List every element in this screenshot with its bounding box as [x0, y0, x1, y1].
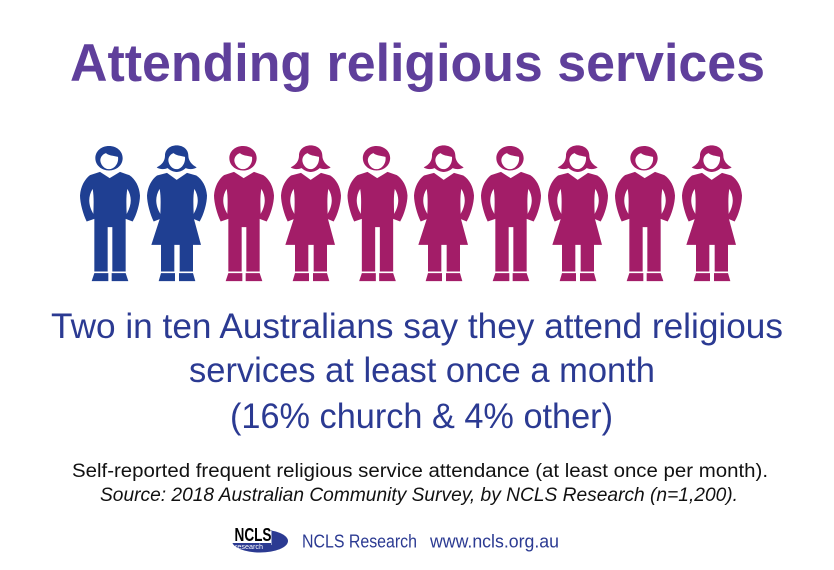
- icon: person 10 woman magenta: [682, 145, 742, 281]
- main statement: Two in ten Australians say they attend religious: [51, 307, 783, 346]
- icon: person 6 woman magenta: [414, 145, 474, 281]
- icon: person 5 man magenta: [348, 146, 407, 281]
- main statement: [51, 307, 783, 436]
- icon: person 7 man magenta: [481, 146, 541, 281]
- logo: NCLS Research: [232, 524, 288, 552]
- pictogram: ten people, two highlighted: [80, 145, 742, 281]
- logo: NCLS Research: research: [235, 544, 263, 551]
- logo: NCLS Research: NCLS: [234, 525, 272, 545]
- icon: person 1 man blue: [80, 146, 140, 281]
- icon: person 9 man magenta: [615, 146, 675, 281]
- footer website: www.ncls.org.au: [429, 532, 559, 552]
- source note: [72, 461, 768, 506]
- main statement: (16% church & 4% other): [230, 397, 613, 436]
- source note: Source: 2018 Australian Community Survey, by NCLS Research (n=1,200).: [100, 485, 738, 506]
- footer organisation name: NCLS Research: [302, 532, 417, 552]
- title: Attending religious services: [70, 34, 765, 93]
- icon: person 2 woman blue: [147, 145, 207, 281]
- icon: person 4 woman magenta: [281, 145, 341, 281]
- main statement: services at least once a month: [189, 351, 655, 390]
- icon: person 3 man magenta: [214, 146, 274, 281]
- source note: Self-reported frequent religious service attendance (at least once per month).: [72, 461, 768, 482]
- icon: person 8 woman magenta: [548, 145, 608, 281]
